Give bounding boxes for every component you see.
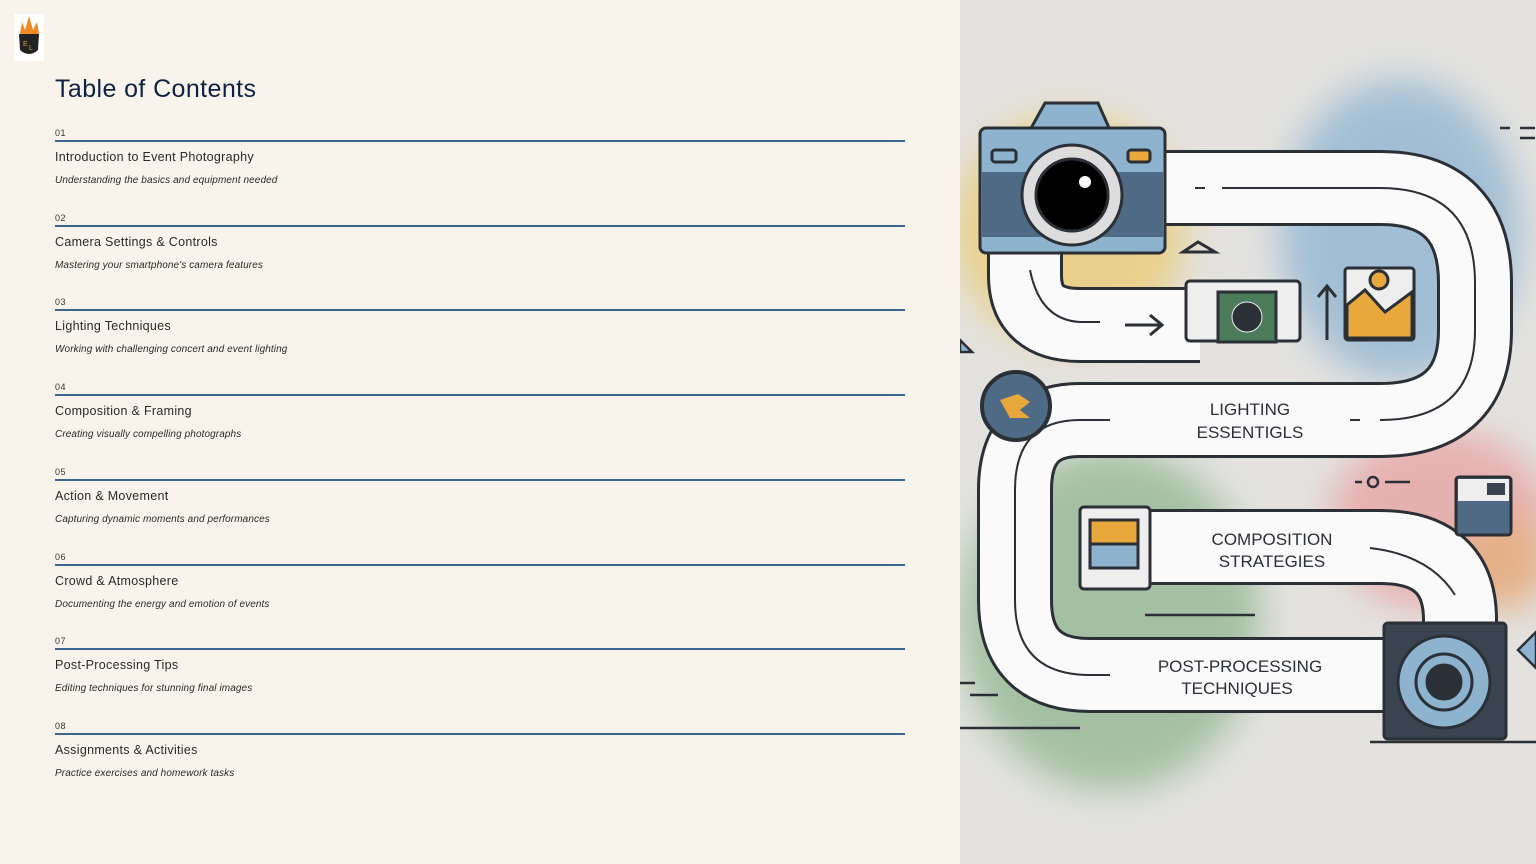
labels on road: POST-PROCESSING (1158, 657, 1322, 676)
panel: table of contents (0, 0, 960, 864)
icon: lens (1384, 623, 1506, 739)
item 03 (55, 297, 905, 355)
item 04: Creating visually compelling photographs (55, 429, 241, 440)
item 03: Working with challenging concert and event lighting (55, 344, 287, 355)
item 07: 07 (55, 636, 66, 646)
logo: E (23, 41, 28, 48)
item 08: Assignments & Activities (55, 743, 198, 757)
item 05: Action & Movement (55, 489, 168, 503)
icon: small camera and image (1125, 242, 1414, 342)
logo: L (29, 45, 33, 52)
labels on road: TECHNIQUES (1181, 679, 1293, 698)
labels on road: ESSENTIGLS (1197, 423, 1303, 442)
item 08 (55, 721, 905, 779)
title: Table of Contents (55, 75, 256, 103)
labels on road (1158, 400, 1332, 698)
item 01: Understanding the basics and equipment needed (55, 175, 277, 186)
icon: camera (980, 103, 1165, 253)
item 06 (55, 552, 905, 610)
logo (14, 14, 44, 61)
labels on road: STRATEGIES (1219, 552, 1325, 571)
item 02: Mastering your smartphone's camera features (55, 260, 263, 271)
item 01: Introduction to Event Photography (55, 150, 254, 164)
item 07: Editing techniques for stunning final images (55, 683, 252, 694)
item 05: 05 (55, 467, 66, 477)
icon: small box (1456, 477, 1511, 535)
item 04 (55, 382, 905, 440)
item 02: Camera Settings & Controls (55, 235, 218, 249)
illustration: photography road map (960, 0, 1536, 864)
item 07: Post-Processing Tips (55, 658, 178, 672)
item 02: 02 (55, 213, 66, 223)
item 05: Capturing dynamic moments and performances (55, 514, 270, 525)
item 06: Documenting the energy and emotion of events (55, 599, 270, 610)
item 01: 01 (55, 128, 66, 138)
item 03: Lighting Techniques (55, 319, 171, 333)
item 04: 04 (55, 382, 66, 392)
item 07 (55, 636, 905, 694)
item 06: Crowd & Atmosphere (55, 574, 179, 588)
item 04: Composition & Framing (55, 404, 192, 418)
item 06: 06 (55, 552, 66, 562)
labels on road: LIGHTING (1210, 400, 1290, 419)
item 03: 03 (55, 297, 66, 307)
icon: circle badge (982, 372, 1050, 440)
item 08: 08 (55, 721, 66, 731)
item 02 (55, 213, 905, 271)
labels on road: COMPOSITION (1212, 530, 1332, 549)
item 05 (55, 467, 905, 525)
icon: composition frame (1080, 507, 1150, 589)
item 08: Practice exercises and homework tasks (55, 768, 234, 779)
item 01 (55, 128, 905, 186)
